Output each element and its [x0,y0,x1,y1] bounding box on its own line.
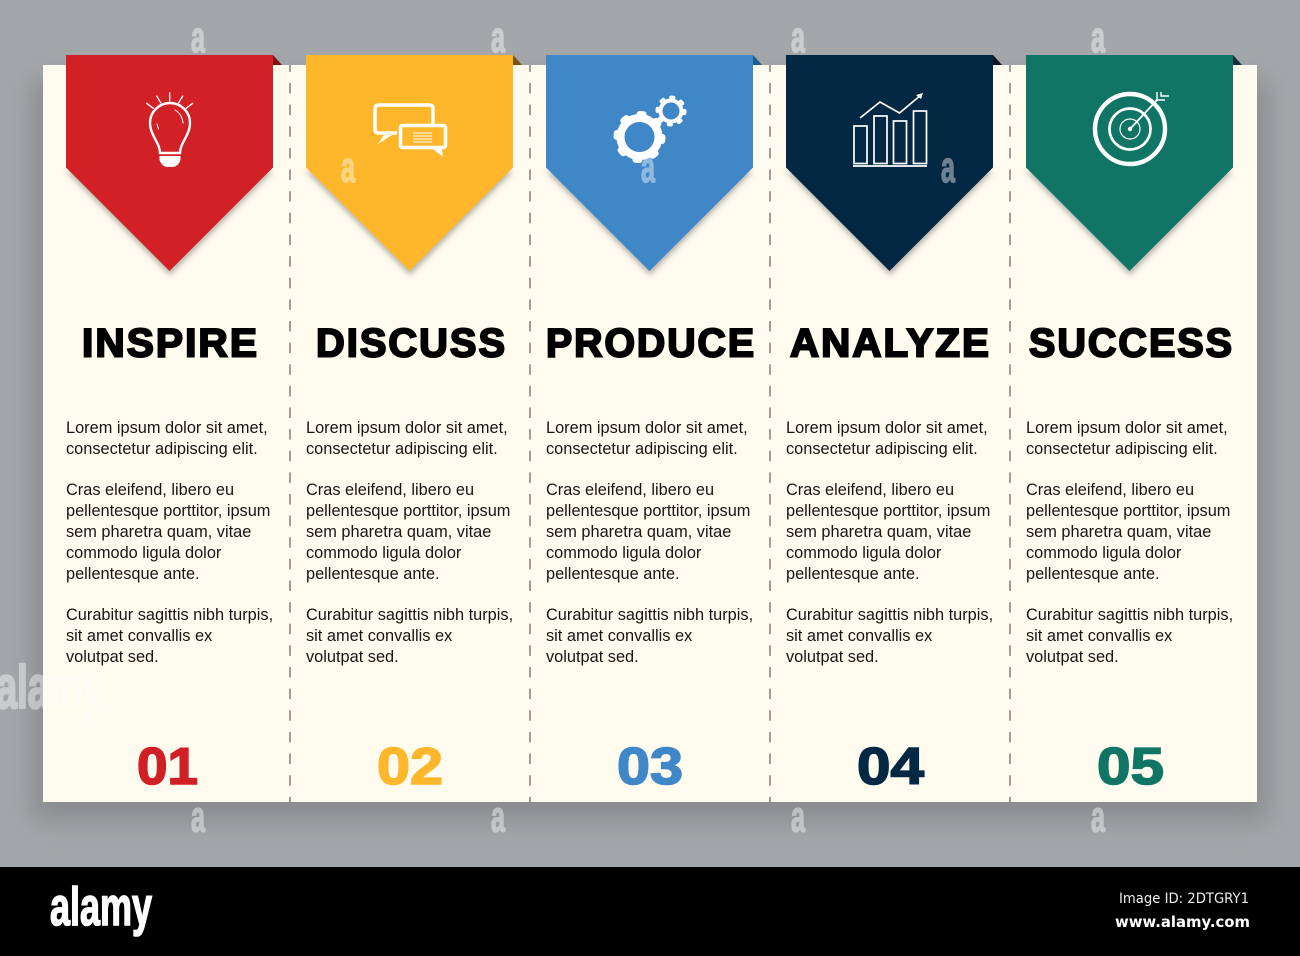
text block: column 3: commodo ligula dolor [546,544,702,562]
number 03: 03 [617,738,683,796]
icon: target [1095,92,1169,164]
text block: column 2: Cras eleifend, libero eu [306,481,474,499]
watermarks: a [1091,792,1105,842]
text block: column 5: volutpat sed. [1026,648,1119,666]
watermarks: a [491,792,505,842]
text block: column 5: Curabitur sagittis nibh turpis, [1026,606,1233,624]
text block: column 5: pellentesque ante. [1026,565,1160,583]
text block: column 1 [66,419,273,666]
text block: column 1: consectetur adipiscing elit. [66,440,258,458]
icon: light bulb [147,93,193,167]
text block: column 2: pellentesque porttitor, ipsum [306,502,510,520]
text block: column 5: commodo ligula dolor [1026,544,1182,562]
footer url: www.alamy.com [1115,913,1250,931]
text block: column 4: pellentesque ante. [786,565,920,583]
text block: column 5: sit amet convallis ex [1026,627,1172,645]
watermarks: a [491,13,505,62]
banner: analyze [786,55,1002,275]
text block: column 5: pellentesque porttitor, ipsum [1026,502,1230,520]
column dividers [290,65,1010,802]
watermarks [0,13,1105,842]
text block: column 1: Cras eleifend, libero eu [66,481,234,499]
banner: success [1026,55,1242,275]
text block: column 5: Lorem ipsum dolor sit amet, [1026,419,1228,437]
text block: column 3: volutpat sed. [546,648,639,666]
number 04: 04 [857,738,924,796]
footer logo: alamy [50,877,152,937]
text block: column 4: consectetur adipiscing elit. [786,440,978,458]
heading: produce: PRODUCE [546,322,756,366]
text block: column 4: Lorem ipsum dolor sit amet, [786,419,988,437]
text block: column 5: Cras eleifend, libero eu [1026,481,1194,499]
panel shadow [32,80,1268,822]
icon: chat bubbles [375,105,446,157]
watermarks: a [641,143,655,192]
text block: column 3: Cras eleifend, libero eu [546,481,714,499]
watermarks: a [791,13,805,62]
text block: column 1: pellentesque ante. [66,565,200,583]
watermarks: alamy [0,654,104,721]
text block: column 3: consectetur adipiscing elit. [546,440,738,458]
text block: column 1: Curabitur sagittis nibh turpis, [66,606,273,624]
watermarks: a [191,13,205,62]
text block: column 2: sit amet convallis ex [306,627,452,645]
text block: column 1: volutpat sed. [66,648,159,666]
text block: column 5: consectetur adipiscing elit. [1026,440,1218,458]
text block: column 2 [306,419,513,666]
watermarks: a [191,792,205,842]
number 02: 02 [377,738,443,796]
text block: column 4: Cras eleifend, libero eu [786,481,954,499]
text block: column 2: pellentesque ante. [306,565,440,583]
text block: column 2: Curabitur sagittis nibh turpis, [306,606,513,624]
text block: column 1: Lorem ipsum dolor sit amet, [66,419,268,437]
text block: column 5 [1026,419,1233,666]
text block: column 3: pellentesque porttitor, ipsum [546,502,750,520]
text block: column 1: sit amet convallis ex [66,627,212,645]
number 01: 01 [137,738,198,796]
watermarks: a [341,143,355,192]
watermarks: a [1091,13,1105,62]
banner: inspire [66,55,282,275]
text block: column 4: Curabitur sagittis nibh turpis, [786,606,993,624]
main panel [43,65,1257,802]
text block: column 3: Curabitur sagittis nibh turpis, [546,606,753,624]
text block: column 2: volutpat sed. [306,648,399,666]
text block: column 4: volutpat sed. [786,648,879,666]
text block: column 3: pellentesque ante. [546,565,680,583]
heading: inspire: INSPIRE [82,322,259,366]
text block: column 3 [546,419,753,666]
text block: column 2: consectetur adipiscing elit. [306,440,498,458]
text block: column 4: sem pharetra quam, vitae [786,523,971,541]
text block: column 4: pellentesque porttitor, ipsum [786,502,990,520]
text block: column 1: sem pharetra quam, vitae [66,523,251,541]
banner: produce [546,55,762,275]
text block: column 1: commodo ligula dolor [66,544,222,562]
text block: column 4: sit amet convallis ex [786,627,932,645]
heading: discuss: DISCUSS [316,322,507,366]
footer image id: Image ID: 2DTGRY1 [1119,891,1249,907]
banner: discuss [306,55,522,275]
text block: column 3: sem pharetra quam, vitae [546,523,731,541]
heading: analyze: ANALYZE [790,322,991,366]
heading: success: SUCCESS [1029,322,1234,366]
footer bar [0,867,1300,956]
text block: column 2: Lorem ipsum dolor sit amet, [306,419,508,437]
text block: column 3: Lorem ipsum dolor sit amet, [546,419,748,437]
text block: column 4 [786,419,993,666]
text block: column 3: sit amet convallis ex [546,627,692,645]
text block: column 4: commodo ligula dolor [786,544,942,562]
text block: column 5: sem pharetra quam, vitae [1026,523,1211,541]
watermarks: a [791,792,805,842]
icon: gears [616,98,684,160]
text block: column 2: sem pharetra quam, vitae [306,523,491,541]
number 05: 05 [1097,738,1164,796]
text block: column 1: pellentesque porttitor, ipsum [66,502,270,520]
watermarks: a [941,143,955,192]
icon: bar chart with arrow [853,93,927,166]
text block: column 2: commodo ligula dolor [306,544,462,562]
